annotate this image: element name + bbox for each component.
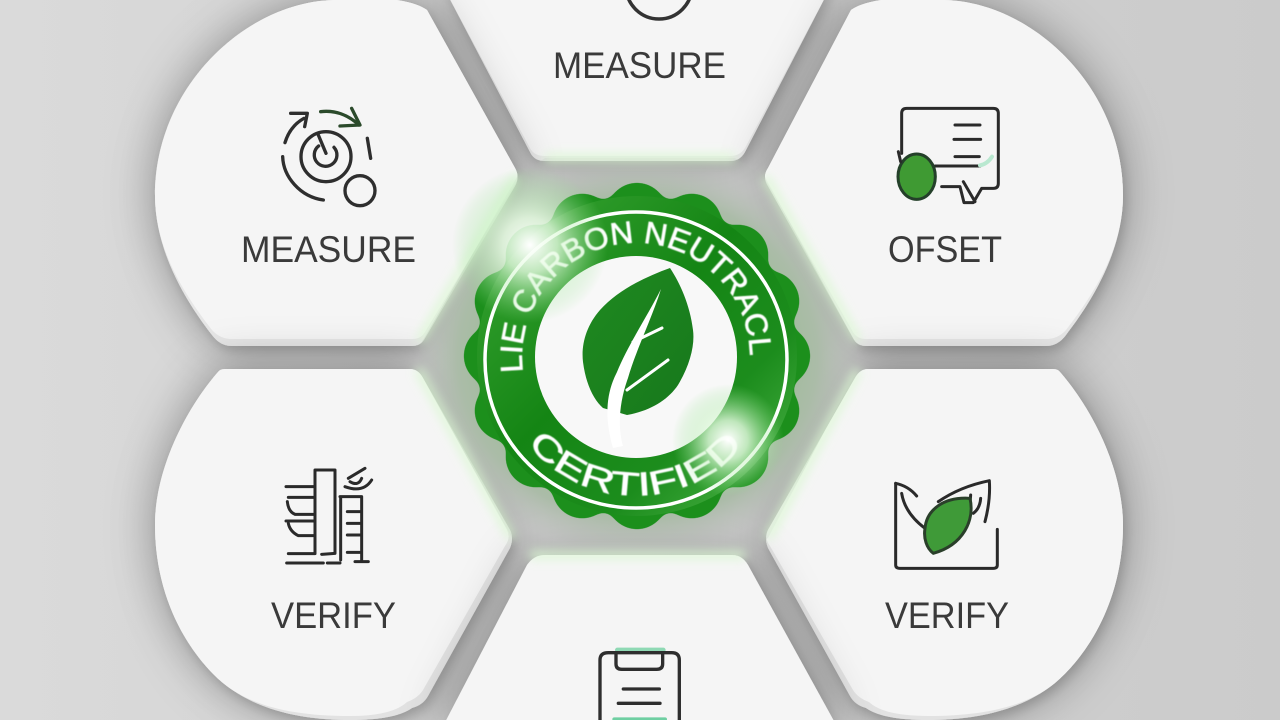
icon: clipboard	[600, 650, 679, 720]
hub: gray-green centre behind badge	[418, 158, 857, 555]
lens flare: lower right	[672, 384, 784, 496]
panel: right offset	[765, 0, 1123, 346]
seal text top: LIE CARBON NEUTRACL	[500, 220, 772, 372]
label: verify left: VERIFY	[271, 595, 396, 636]
label: measure top: MEASURE	[553, 45, 726, 86]
lens flare: upper left	[452, 167, 608, 323]
panel: bottom	[440, 555, 840, 720]
seal shading	[477, 196, 797, 516]
icon: partial gauge circle	[626, 0, 692, 19]
panel: right verify	[766, 369, 1123, 720]
icon: building stack	[286, 468, 372, 563]
label: measure left: MEASURE	[241, 229, 416, 270]
icon: leaf	[583, 268, 693, 448]
icon: leaf in box	[896, 481, 997, 568]
seal text bottom: CERTIFIED	[532, 433, 737, 496]
icon: certificate with green seal	[898, 108, 998, 203]
label: offset: OFSET	[888, 229, 1002, 270]
hub: glowing panel edges	[418, 158, 858, 555]
seal white ring	[485, 212, 787, 508]
label: verify right: VERIFY	[885, 595, 1009, 636]
icon: rotating target	[283, 108, 375, 206]
panel: left measure	[155, 0, 518, 346]
seal inner disc	[535, 256, 737, 458]
panel: top measure	[444, 0, 830, 161]
seal scalloped edge	[464, 183, 810, 529]
badge: carbon neutral seal	[464, 182, 810, 530]
panel: left verify	[155, 369, 512, 720]
